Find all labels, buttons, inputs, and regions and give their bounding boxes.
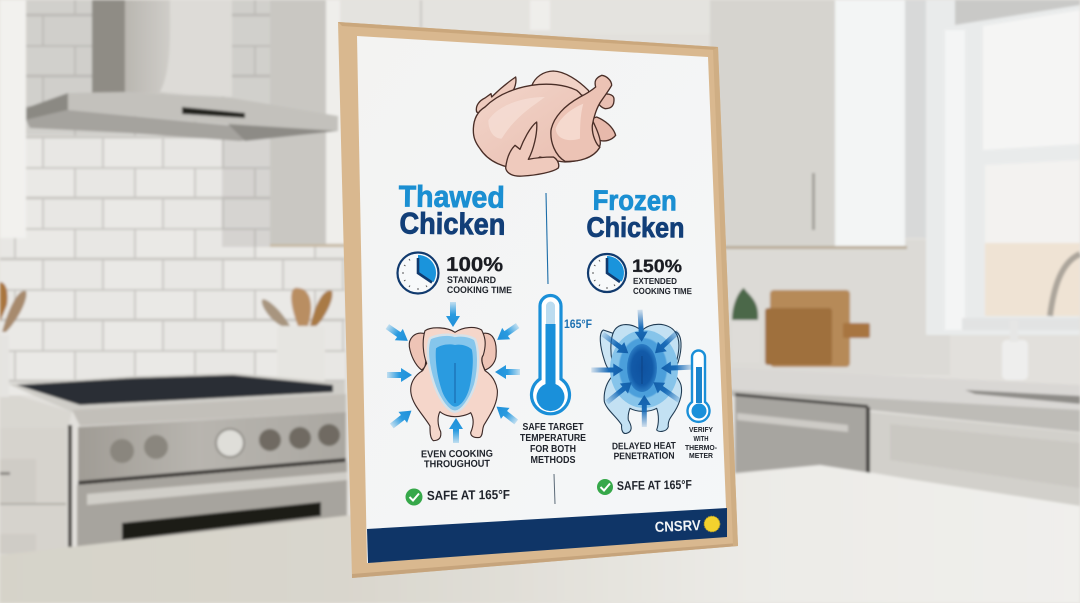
footer band xyxy=(367,508,727,563)
poster frame xyxy=(338,22,738,578)
dishwasher xyxy=(735,393,870,474)
stat: standard cooking time: STANDARD xyxy=(447,274,496,285)
divider: top xyxy=(546,193,548,284)
range hood xyxy=(26,0,338,141)
range knobs xyxy=(110,424,340,463)
heat arrows xyxy=(591,309,693,427)
body highlight xyxy=(488,97,545,139)
faucet xyxy=(1050,254,1080,316)
label: safe target temperature: METHODS xyxy=(530,455,576,466)
stat: standard cooking time: COOKING TIME xyxy=(447,284,512,295)
range cooktop xyxy=(8,373,345,412)
label: verify with thermometer: METER xyxy=(689,451,714,460)
thigh highlight xyxy=(556,104,583,140)
label: delayed heat penetration xyxy=(612,441,676,462)
chicken body xyxy=(409,327,497,441)
stat: extended cooking time: 150% xyxy=(632,256,682,276)
upper cabinet, far left xyxy=(0,0,26,238)
label: safe target temperature: SAFE TARGET xyxy=(522,422,584,433)
title: frozen chicken: Frozen xyxy=(593,185,677,216)
rear xyxy=(592,117,616,141)
label: verify with thermometer: THERMO- xyxy=(685,443,717,452)
frozen zone, outer xyxy=(610,330,678,408)
island countertop xyxy=(0,465,1080,603)
icon: central thermometer xyxy=(532,296,570,414)
safe badge: thawed xyxy=(406,487,510,506)
title: frozen chicken: Chicken xyxy=(586,212,685,243)
drumstick xyxy=(551,75,612,161)
upper cabinet, centre xyxy=(270,0,346,247)
frozen core xyxy=(627,344,657,392)
stat: extended cooking time: COOKING TIME xyxy=(633,286,692,296)
heat zone, outer xyxy=(428,335,478,412)
stat: standard cooking time: 100% xyxy=(446,254,503,276)
cutting boards xyxy=(765,290,870,367)
label: delayed heat penetration: DELAYED HEAT xyxy=(612,441,676,452)
title: frozen chicken xyxy=(586,185,685,243)
upper cabinet, right xyxy=(710,0,926,249)
divider: bottom xyxy=(554,474,555,504)
label: verify with thermometer: VERIFY xyxy=(689,425,713,434)
icon: small thermometer xyxy=(688,351,710,422)
label: verify with thermometer: WITH xyxy=(694,434,708,443)
soap bottle xyxy=(1002,320,1028,380)
utensils far left xyxy=(0,282,26,397)
frozen zone, middle xyxy=(619,338,667,398)
label: delayed heat penetration: PENETRATION xyxy=(613,451,675,462)
icon: clock 100% xyxy=(398,252,438,294)
icon: clock 150% xyxy=(588,254,626,292)
label: safe target temperature: TEMPERATURE xyxy=(520,433,586,444)
label: 165°F: 165°F xyxy=(564,319,592,331)
stat: extended cooking time xyxy=(632,256,692,296)
heat arrows xyxy=(383,302,522,443)
potted plant xyxy=(732,288,760,363)
utensil crock xyxy=(262,288,332,382)
back knob xyxy=(597,94,614,109)
title: thawed chicken: Thawed xyxy=(399,180,505,215)
thawed chicken diagram xyxy=(383,302,522,443)
label: safe target temperature: FOR BOTH xyxy=(530,444,576,455)
front wing xyxy=(506,122,559,176)
window xyxy=(926,0,1080,335)
stat: standard cooking time xyxy=(446,254,512,295)
left counter and cabinet xyxy=(0,396,72,554)
right counter xyxy=(730,368,1080,432)
title: thawed chicken: Chicken xyxy=(399,207,506,242)
icon: sun xyxy=(704,516,720,532)
safe badge: thawed: SAFE AT 165°F xyxy=(427,487,510,503)
far wing xyxy=(476,77,516,115)
title: thawed chicken xyxy=(398,180,506,242)
wooden frame xyxy=(338,22,738,578)
hump xyxy=(532,71,590,95)
label: even cooking throughout xyxy=(421,449,493,470)
safe badge: frozen xyxy=(597,478,692,495)
label: even cooking throughout: EVEN COOKING xyxy=(421,449,493,460)
heat zone, core xyxy=(436,344,473,407)
label: safe target temperature xyxy=(520,422,586,466)
poster paper xyxy=(357,36,727,563)
stat: extended cooking time: EXTENDED xyxy=(633,276,677,286)
right wall xyxy=(725,240,950,375)
chicken body xyxy=(600,324,682,433)
range body xyxy=(68,394,347,547)
frozen chicken diagram xyxy=(591,309,693,433)
label: even cooking throughout: THROUGHOUT xyxy=(424,459,490,470)
main body xyxy=(473,84,600,169)
tiled backsplash, left xyxy=(0,0,345,395)
lower cabinets, right xyxy=(870,412,1080,510)
hero chicken illustration xyxy=(473,71,616,176)
footer logo: CNSRV xyxy=(654,518,701,536)
label: verify with thermometer xyxy=(685,425,717,460)
safe badge: frozen: SAFE AT 165°F xyxy=(617,478,692,493)
